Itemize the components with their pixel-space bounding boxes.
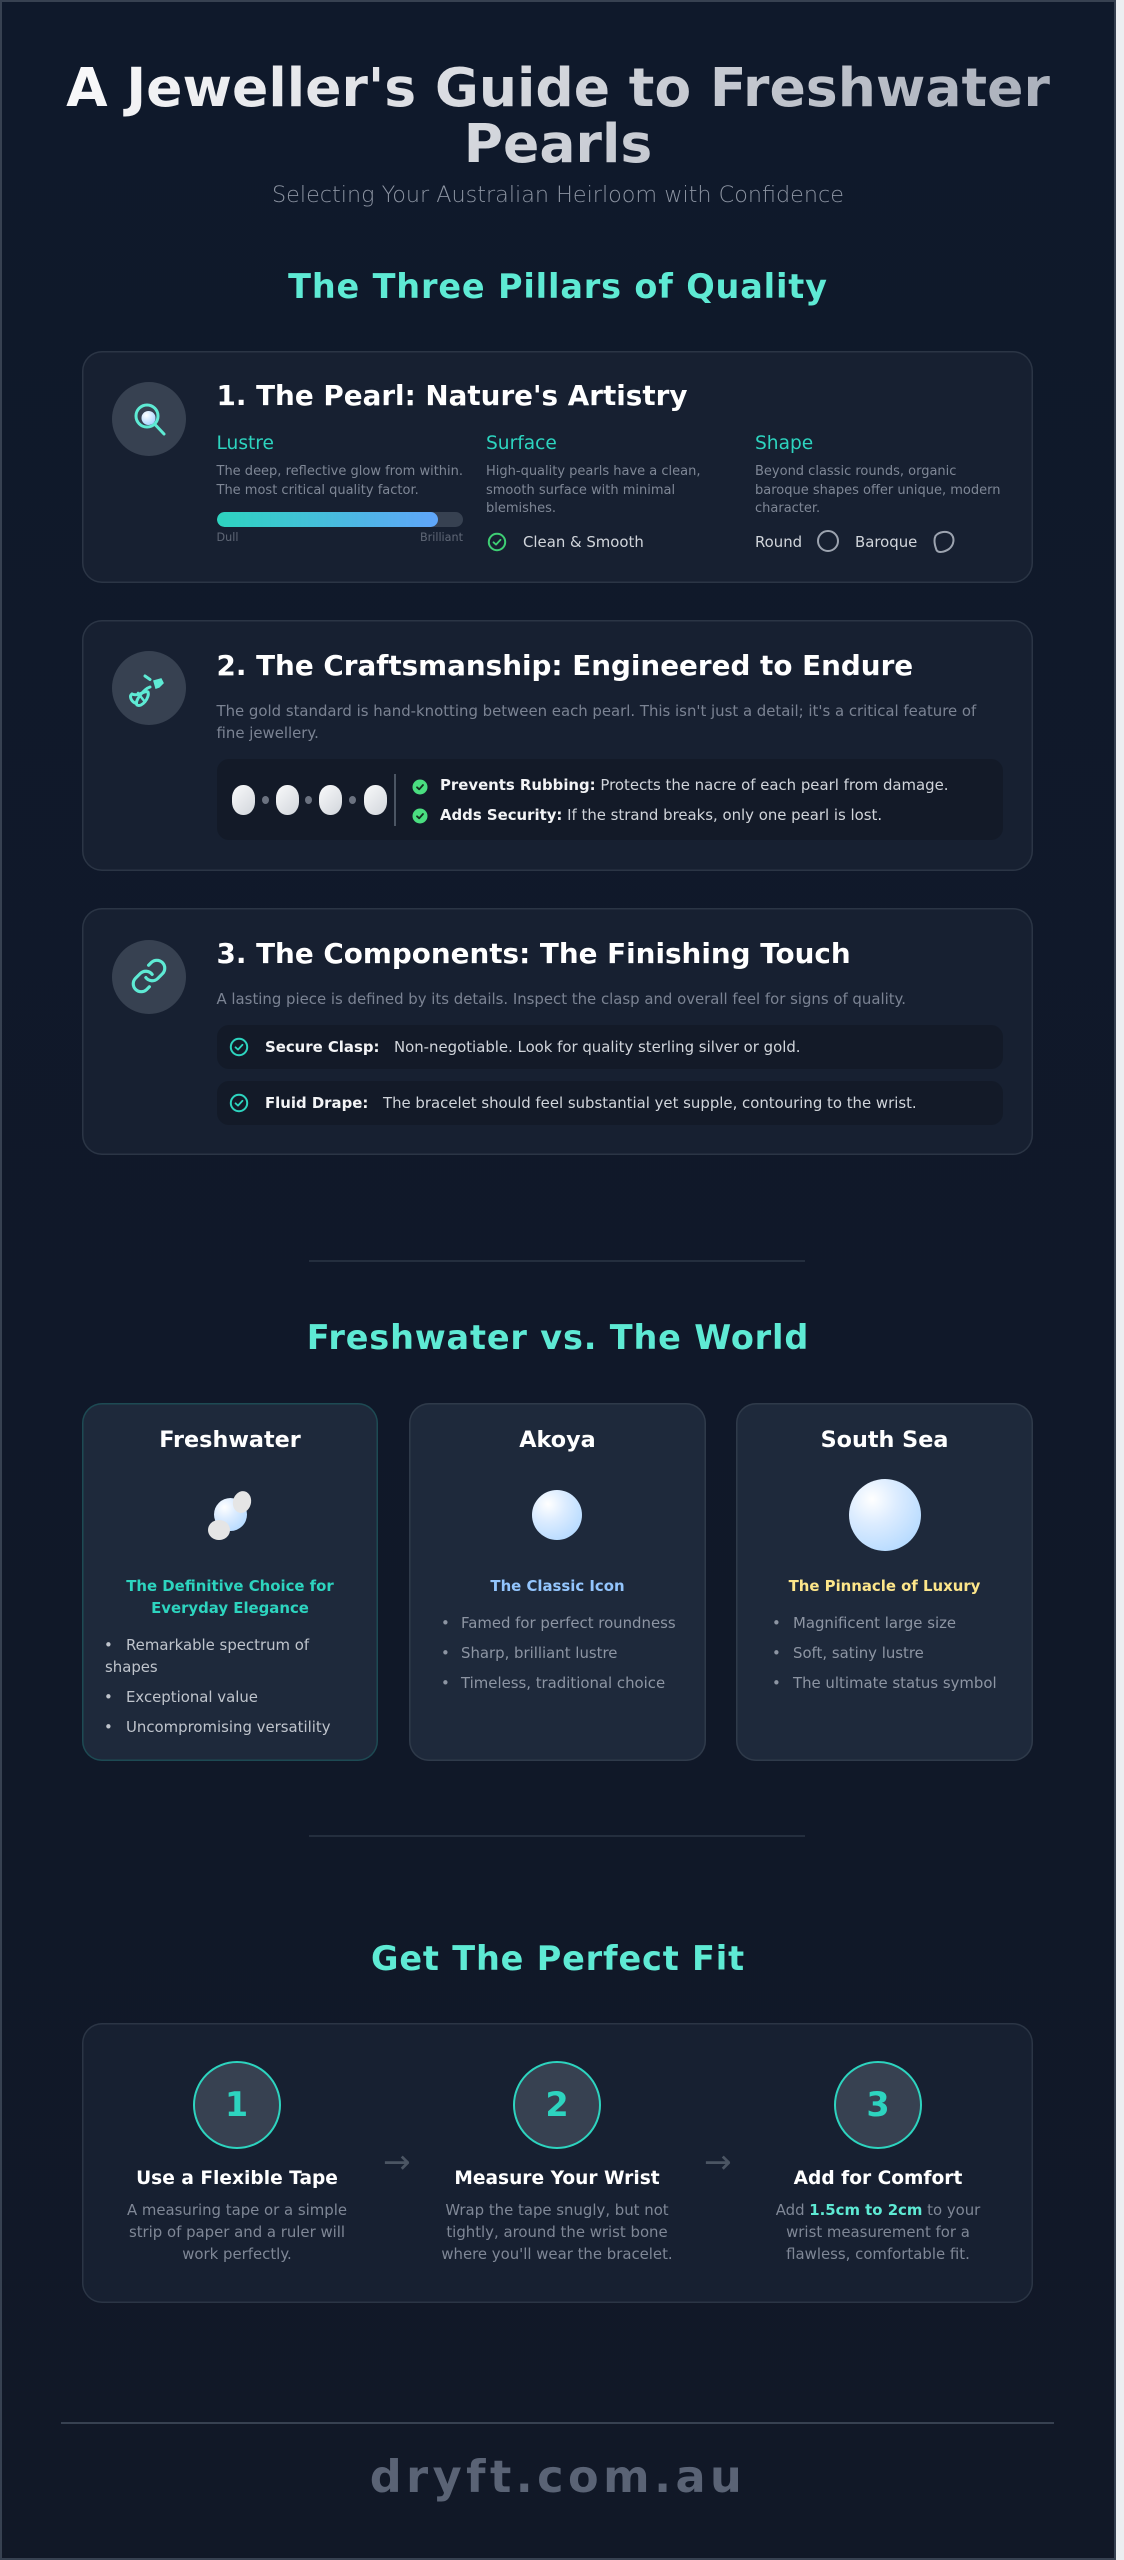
icon: baroque outline [934,530,954,553]
shape label: round: Round [755,533,802,551]
lustre description: The most critical quality factor. [216,483,419,498]
shape description: baroque shapes offer unique, modern [755,483,1000,498]
lustre heading: Lustre [216,433,274,454]
benefit 1: Prevents Rubbing: Protects the nacre of each pearl from damage. [440,776,949,794]
feature list: • [104,1636,113,1654]
step 1 description: strip of paper and a ruler will [129,2223,345,2241]
panel: measuring steps [82,2023,1033,2303]
bar label: brilliant: Brilliant [420,531,463,544]
step 2 number: 2 [545,2085,569,2124]
card tagline: The Pinnacle of Luxury [789,1577,980,1595]
card title: South Sea [821,1427,948,1453]
step 2 title: Measure Your Wrist [454,2168,660,2189]
icon: check [230,1094,248,1112]
step 3 number [834,2061,922,2149]
card tagline: Everyday Elegance [151,1599,309,1617]
feature list: Uncompromising versatility [126,1718,331,1736]
feature list: Exceptional value [126,1688,258,1706]
surface label: Clean & Smooth [523,533,644,551]
feature list: • [772,1644,781,1662]
feature list: Famed for perfect roundness [461,1614,676,1632]
feature list: Soft, satiny lustre [793,1644,924,1662]
feature list: Magnificent large size [793,1614,956,1632]
card tagline: The Definitive Choice for [126,1577,334,1595]
footer brand: dryft.com.au [370,2451,746,2503]
icon: check [488,532,506,552]
icon: chain link [112,940,186,1014]
bar label: dull: Dull [216,531,238,544]
text: The bracelet should feel substantial yet supple, contouring to the wrist. [383,1094,917,1112]
card title: Freshwater [159,1427,301,1453]
label: Fluid Drape: [265,1094,368,1112]
feature list: shapes [105,1658,158,1676]
lustre bar [217,512,463,527]
card title: Akoya [519,1427,596,1453]
arrow: → [704,2142,732,2181]
feature list: The ultimate status symbol [793,1674,997,1692]
feature list: • [104,1718,113,1736]
shape heading: Shape [755,433,813,454]
feature list [772,1614,997,1692]
panel: the pearl [82,351,1033,583]
feature list: • [772,1674,781,1692]
step 2 description: tightly, around the wrist bone [446,2223,668,2241]
feature list: • [441,1674,450,1692]
panel: the craftsmanship [82,620,1033,871]
panel heading: 3. The Components: The Finishing Touch [216,937,851,970]
card: freshwater [82,1403,378,1761]
surface heading: Surface [486,433,557,454]
step 2 number [513,2061,601,2149]
step 2 description [441,2201,673,2263]
surface description [486,464,700,516]
shape description [755,464,1000,516]
title: Pearls [464,112,652,175]
step 2 description: where you'll wear the bracelet. [441,2245,673,2263]
step 3 description [776,2201,980,2263]
step 3 description: wrist measurement for a [786,2223,970,2241]
step 1 title: Use a Flexible Tape [136,2168,338,2189]
panel description: fine jewellery. [216,724,319,742]
icon: check [230,1038,248,1056]
label: Secure Clasp: [265,1038,379,1056]
step 1 number [192,2061,280,2149]
card tagline [126,1577,334,1617]
panel: the components [82,908,1033,1155]
icon: magnifier over pearl [112,382,186,456]
surface description: High-quality pearls have a clean, [486,464,700,479]
row: secure clasp [217,1025,1003,1069]
card: south sea [736,1403,1033,1761]
heading: get the perfect fit: Get The Perfect Fit [371,1939,745,1978]
subtitle: Selecting Your Australian Heirloom with Confidence [272,182,844,208]
feature list: • [441,1644,450,1662]
feature list: • [772,1614,781,1632]
row: fluid drape [217,1081,1003,1125]
benefit 2: Adds Security: If the strand breaks, only one pearl is lost. [440,806,882,824]
benefit check 2 [412,808,428,824]
surface description: smooth surface with minimal [486,483,675,498]
feature list: Sharp, brilliant lustre [461,1644,617,1662]
callout: knotted strand and benefits [217,759,1003,840]
shape label: baroque: Baroque [855,533,917,551]
step 1 number: 1 [225,2085,248,2124]
lustre description [216,464,463,498]
step 3 description: flawless, comfortable fit. [786,2245,970,2263]
feature list: • [104,1688,113,1706]
icon: large pearl [848,1479,920,1551]
knotted pearl strand [232,785,387,815]
title: A Jeweller's Guide to Freshwater [66,56,1050,119]
lustre description: The deep, reflective glow from within. [216,464,463,479]
step 1 description: A measuring tape or a simple [127,2201,347,2219]
step 3 description: Add 1.5cm to 2cm to your [776,2201,980,2219]
icon: knot [112,651,186,725]
panel description: The gold standard is hand-knotting between each pearl. This isn't just a detail; it's a critical feature of [216,702,976,720]
feature list [104,1636,331,1736]
shape description: Beyond classic rounds, organic [755,464,956,479]
panel heading: 2. The Craftsmanship: Engineered to Endure [216,649,913,682]
card: akoya [409,1403,706,1761]
card tagline: The Classic Icon [490,1577,625,1595]
step 1 description: work perfectly. [182,2245,292,2263]
feature list: • [441,1614,450,1632]
panel heading: 1. The Pearl: Nature's Artistry [216,379,687,412]
shape description: character. [755,501,820,516]
arrow: → [383,2142,411,2181]
step 3 title: Add for Comfort [794,2168,962,2189]
heading: freshwater vs the world: Freshwater vs. The World [307,1318,809,1357]
icon: round pearl [532,1490,582,1540]
title [0,60,1116,172]
icon: baroque pearl [208,1491,252,1540]
heading: the three pillars of quality: The Three Pillars of Quality [288,267,828,306]
icon: round outline [817,530,839,552]
feature list: Timeless, traditional choice [461,1674,665,1692]
panel description [216,702,976,742]
benefit check 1 [412,780,428,794]
step 3 number: 3 [866,2085,890,2124]
surface description: blemishes. [486,501,556,516]
feature list [441,1614,676,1692]
step 2 description: Wrap the tape snugly, but not [445,2201,669,2219]
panel description: A lasting piece is defined by its details. Inspect the clasp and overall feel for signs of quality. [216,990,906,1008]
feature list: Remarkable spectrum of [126,1636,309,1654]
text: Non-negotiable. Look for quality sterling silver or gold. [394,1038,801,1056]
step 1 description [127,2201,347,2263]
